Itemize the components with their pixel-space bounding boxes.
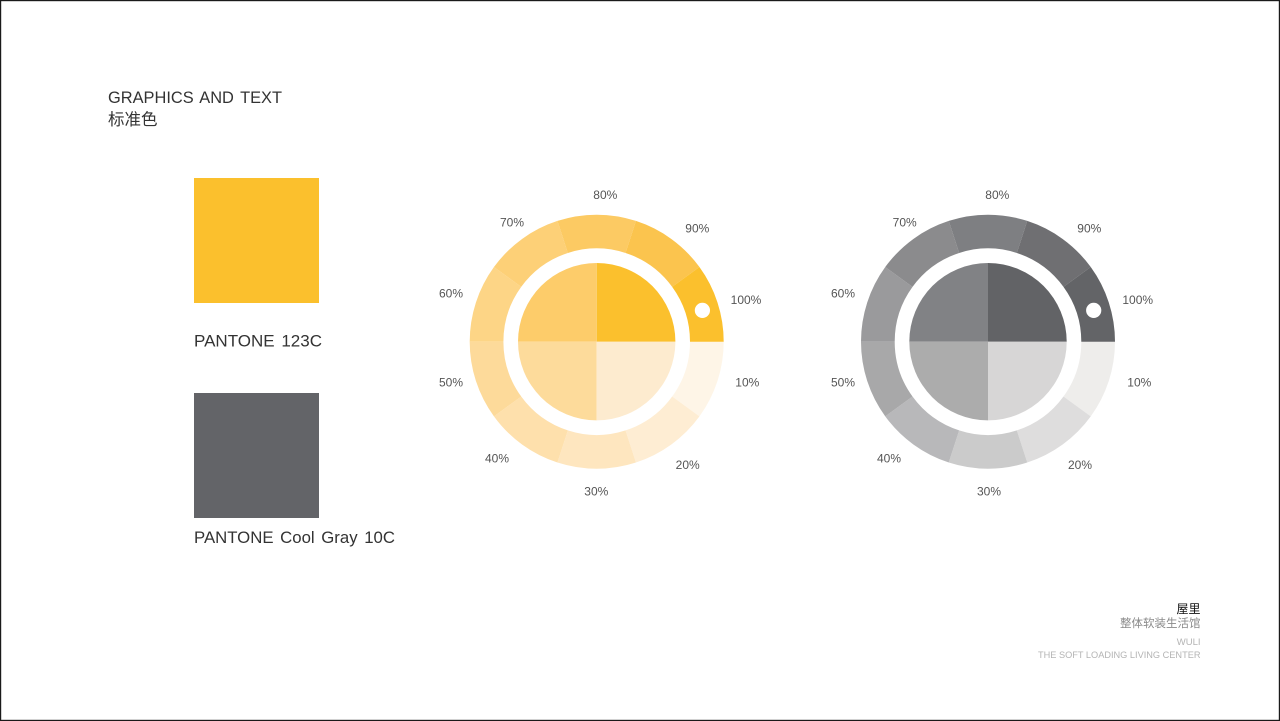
percent labels: yellow: 20%: [676, 458, 700, 472]
label: gray swatch: PANTONE Cool Gray 10C: [194, 528, 395, 547]
percent labels: yellow: 100%: [731, 293, 762, 307]
dot marker: gray: [1086, 303, 1101, 318]
percent labels: gray: 60%: [831, 287, 855, 301]
percent labels: yellow: 50%: [439, 376, 463, 390]
inner quadrant disc: yellow: [518, 263, 675, 420]
swatch: gray: [194, 393, 319, 518]
dot marker: yellow: [695, 303, 710, 318]
title: GRAPHICS AND TEXT: [108, 88, 282, 107]
title: 标准色: [108, 110, 158, 129]
percent labels: gray: 70%: [893, 216, 917, 230]
percent labels: yellow: 90%: [685, 222, 710, 236]
percent labels: gray: 30%: [977, 485, 1001, 499]
footer brand block: 整体软装生活馆: [1120, 616, 1200, 630]
inner quadrant disc: gray: [909, 263, 1067, 420]
percent labels: gray: 20%: [1068, 458, 1092, 472]
outer ring segments: yellow: [470, 215, 724, 469]
percent labels: gray: 90%: [1077, 222, 1102, 236]
percent labels: gray: [831, 188, 1153, 499]
percent labels: yellow: 80%: [593, 188, 618, 202]
percent labels: gray: 80%: [985, 188, 1010, 202]
percent labels: yellow: [439, 188, 762, 499]
percent labels: gray: 40%: [877, 451, 901, 465]
percent labels: yellow: 60%: [439, 287, 463, 301]
outer ring segments: gray: [861, 215, 1115, 469]
chart: gray tint wheel: [831, 188, 1153, 499]
label: yellow swatch: PANTONE 123C: [194, 332, 322, 350]
percent labels: yellow: 10%: [735, 376, 760, 390]
footer brand block: [1038, 602, 1201, 661]
percent labels: yellow: 70%: [500, 216, 524, 230]
footer brand block: 屋里: [1176, 602, 1200, 616]
chart: yellow tint wheel: [439, 188, 762, 499]
percent labels: gray: 50%: [831, 376, 855, 390]
title: [108, 88, 282, 129]
percent labels: yellow: 40%: [485, 451, 509, 465]
percent labels: gray: 10%: [1127, 376, 1152, 390]
percent labels: yellow: 30%: [584, 485, 609, 499]
footer brand block: WULI: [1177, 637, 1200, 648]
percent labels: gray: 100%: [1122, 293, 1153, 307]
swatch: yellow: [194, 178, 319, 303]
footer brand block: THE SOFT LOADING LIVING CENTER: [1038, 650, 1201, 661]
